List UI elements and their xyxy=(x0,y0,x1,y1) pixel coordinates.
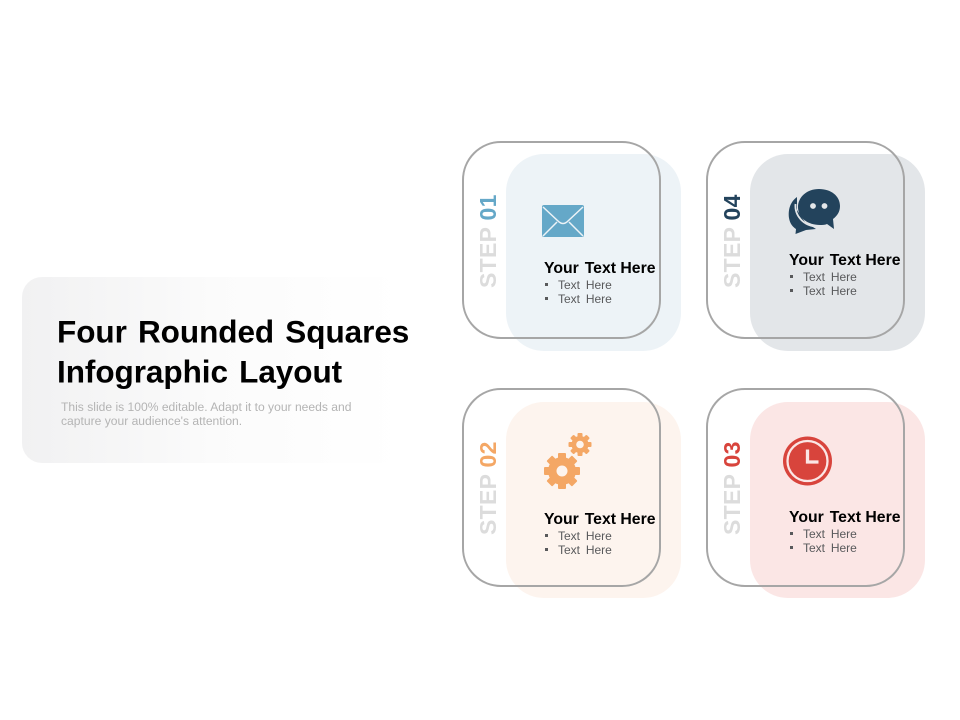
step 01 bullets xyxy=(545,278,612,306)
step 02 bullets xyxy=(545,529,612,557)
step 02 bullets: Text Here xyxy=(558,543,612,557)
panel: step 03 xyxy=(707,389,925,598)
step 01 outline square xyxy=(463,142,660,338)
step 03 tinted square xyxy=(750,402,925,598)
step 04 outline square xyxy=(707,142,904,338)
panel: step 01 xyxy=(463,142,681,351)
step 02 bullets: Text Here xyxy=(558,529,612,543)
icon: envelope xyxy=(542,205,584,237)
title: Infographic Layout xyxy=(57,354,343,390)
step 01 heading: Your Text Here xyxy=(544,260,656,277)
title: Four Rounded Squares xyxy=(57,314,409,350)
description text: capture your audience's attention. xyxy=(61,414,242,428)
step 03 bullets: Text Here xyxy=(803,541,857,555)
icon: gears xyxy=(544,433,592,489)
step 01 tinted square xyxy=(506,154,681,351)
step 04 bullets: Text Here xyxy=(803,284,857,298)
step 01 label: STEP 01 xyxy=(475,194,501,288)
step 04 bullets xyxy=(790,270,857,298)
step 03 label: STEP 03 xyxy=(719,441,745,535)
step 04 tinted square xyxy=(750,154,925,351)
step 03 bullets: Text Here xyxy=(803,527,857,541)
step 04 heading: Your Text Here xyxy=(789,252,901,269)
step 02 heading: Your Text Here xyxy=(544,511,656,528)
step 02 label: STEP 02 xyxy=(475,441,501,535)
step 01 bullets: Text Here xyxy=(558,292,612,306)
panel: title background xyxy=(22,277,402,463)
step 02 tinted square xyxy=(506,402,681,598)
step 04 label: STEP 04 xyxy=(719,194,745,288)
icon: chat bubbles xyxy=(789,189,840,234)
description text: This slide is 100% editable. Adapt it to your needs and xyxy=(61,400,351,414)
step 02 outline square xyxy=(463,389,660,586)
panel: step 02 xyxy=(463,389,681,598)
step 04 bullets: Text Here xyxy=(803,270,857,284)
step 03 bullets xyxy=(790,527,857,555)
icon: clock xyxy=(783,436,832,486)
step 03 heading: Your Text Here xyxy=(789,509,901,526)
panel: step 04 xyxy=(707,142,925,351)
step 01 bullets: Text Here xyxy=(558,278,612,292)
step 03 outline square xyxy=(707,389,904,586)
